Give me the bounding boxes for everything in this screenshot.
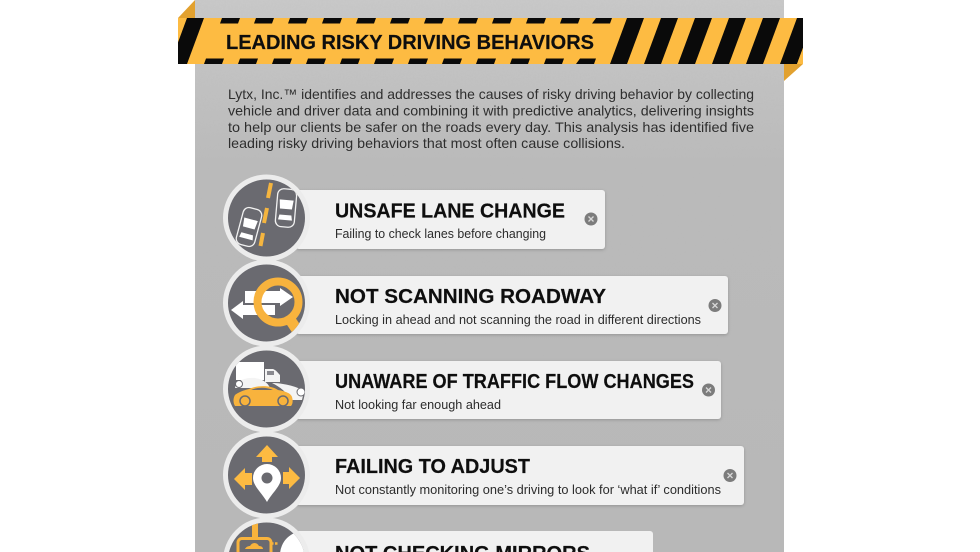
card: unsafe lane change xyxy=(296,190,605,249)
intro paragraph: Lytx, Inc.™ identifies and addresses the causes of risky driving behavior by collecting xyxy=(228,86,754,102)
card heading: UNAWARE OF TRAFFIC FLOW CHANGES xyxy=(335,370,694,393)
intro paragraph: leading risky driving behaviors that most often cause collisions. xyxy=(228,135,625,151)
intro paragraph: vehicle and driver data and combining it with predictive analytics, delivering insights xyxy=(228,102,754,118)
card: unaware of traffic flow changes xyxy=(296,361,721,419)
title: LEADING RISKY DRIVING BEHAVIORS xyxy=(226,31,594,54)
close icon xyxy=(708,299,722,312)
card heading: FAILING TO ADJUST xyxy=(335,455,530,478)
icon: location pin with four arrows xyxy=(226,434,308,516)
panel: grey background xyxy=(195,0,784,552)
ribbon fold right xyxy=(784,64,803,81)
ribbon fold left xyxy=(178,0,195,18)
icon: two cars changing lanes xyxy=(226,177,308,259)
icon: rear-view mirror and side mirror xyxy=(224,518,304,552)
close icon xyxy=(724,469,736,482)
card description: Locking in ahead and not scanning the road in different directions xyxy=(335,313,701,327)
card: not scanning roadway xyxy=(296,276,728,334)
icon: magnifier over direction arrows xyxy=(226,262,308,344)
card heading: UNSAFE LANE CHANGE xyxy=(335,200,565,222)
icon: truck and cars in traffic xyxy=(226,348,308,430)
card: failing to adjust xyxy=(296,446,744,505)
intro paragraph xyxy=(228,86,754,151)
close icon xyxy=(702,384,715,396)
card heading: NOT SCANNING ROADWAY xyxy=(335,285,606,308)
banner: hazard stripe ribbon xyxy=(170,0,814,81)
card: not checking mirrors xyxy=(296,531,653,552)
intro paragraph: to help our clients be safer on the roads every day. This analysis has identified five xyxy=(228,119,754,135)
card description: Not constantly monitoring one’s driving to look for ‘what if’ conditions xyxy=(335,483,721,497)
close icon xyxy=(584,212,598,226)
card description: Failing to check lanes before changing xyxy=(335,227,546,241)
card description: Not looking far enough ahead xyxy=(335,398,501,412)
